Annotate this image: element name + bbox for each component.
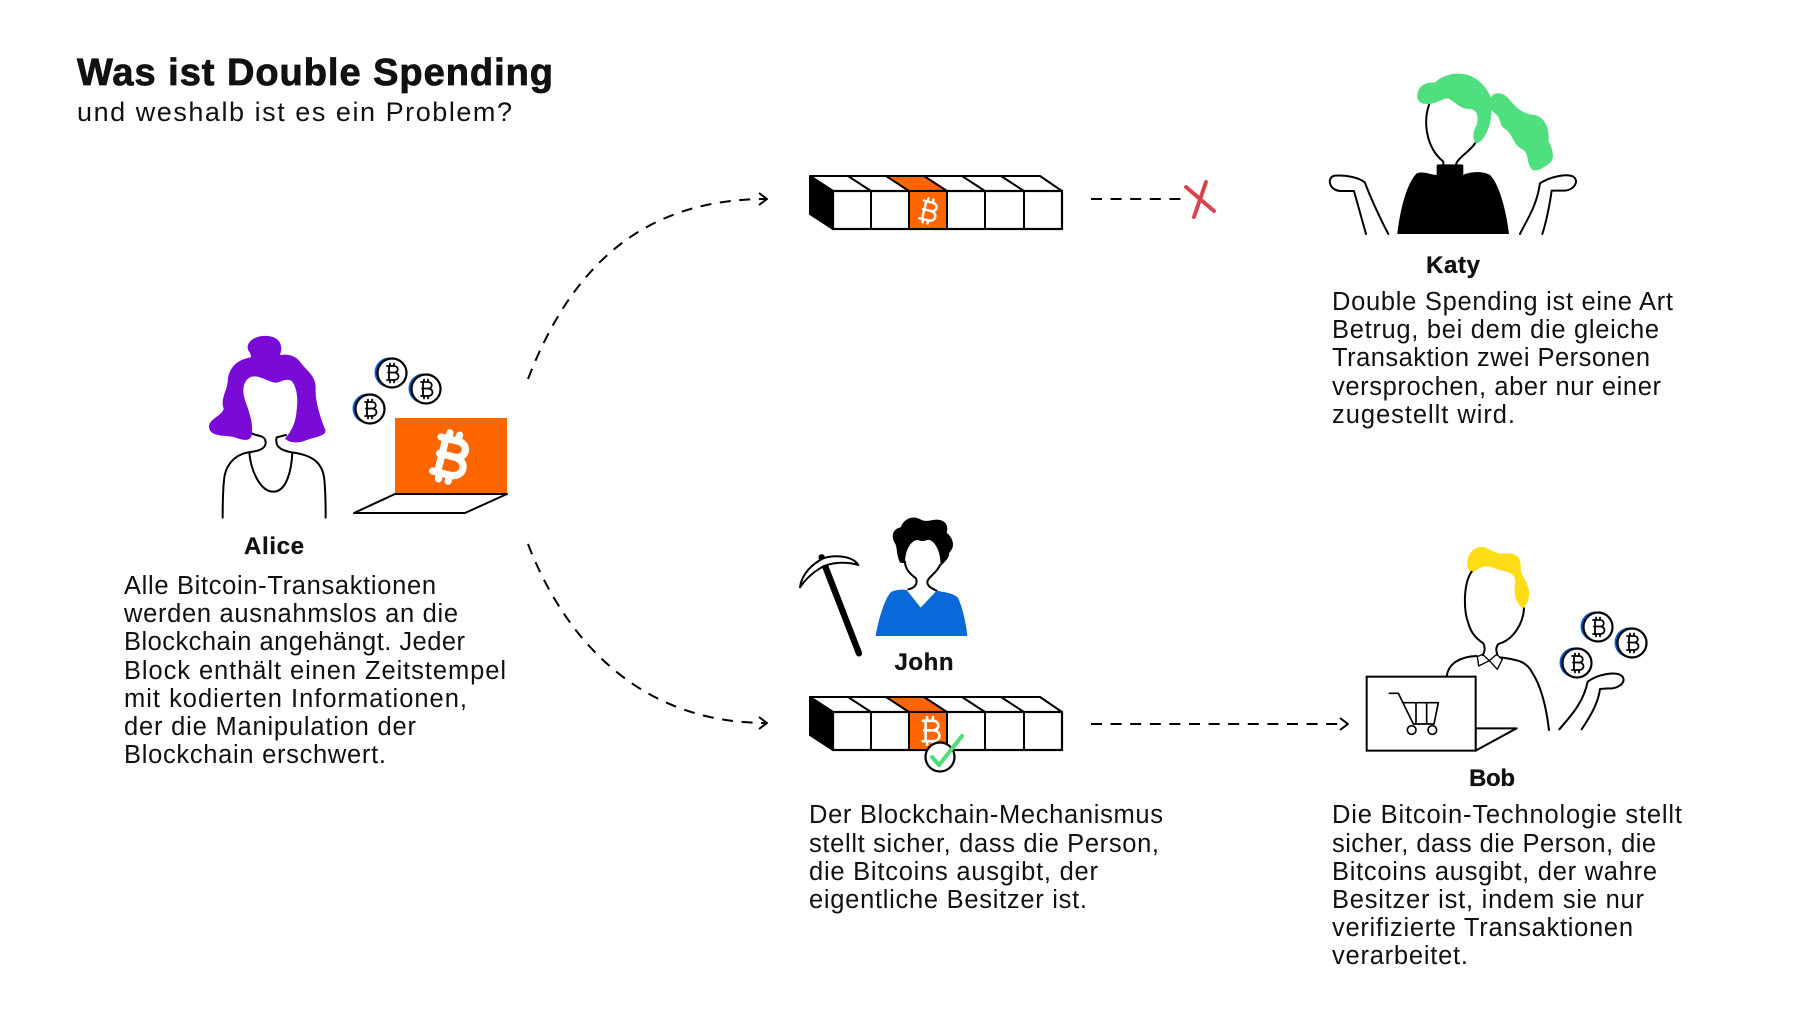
text: John description: Der Blockchain-Mechanismus — [809, 801, 1163, 829]
text: Alice description: der die Manipulation der — [124, 713, 416, 741]
figure: Katy — [1330, 74, 1576, 234]
text: Alice description: Block enthält einen Zeitstempel — [124, 657, 506, 685]
icon: Bob coins — [1560, 612, 1646, 678]
text: John description: die Bitcoins ausgibt, der — [809, 858, 1098, 886]
text: Alice description: Alle Bitcoin-Transaktionen — [124, 572, 436, 600]
text: Katy description: zugestellt wird. — [1332, 401, 1515, 429]
icon: red cross — [1186, 182, 1214, 217]
text: Alice description: Blockchain angehängt. Jeder — [124, 628, 466, 656]
text: Alice description: mit kodierten Informationen, — [124, 685, 467, 713]
chart: upper blockchain — [810, 176, 1062, 229]
text: Katy description: Betrug, bei dem die gleiche — [1332, 316, 1659, 344]
title — [77, 52, 553, 127]
text: Alice description: werden ausnahmslos an die — [123, 600, 458, 628]
title: und weshalb ist es ein Problem? — [77, 97, 512, 127]
arrow: Alice to lower block — [528, 544, 767, 729]
icon: Alice laptop — [354, 418, 507, 513]
icon: pickaxe — [800, 556, 859, 653]
text: John description — [809, 801, 1163, 914]
text: Alice description — [123, 572, 506, 769]
label: John: John — [894, 649, 954, 676]
text: Katy description: Double Spending ist eine Art — [1332, 288, 1673, 316]
text: John description: stellt sicher, dass die Person, — [809, 830, 1159, 858]
text: Bob description: verifizierte Transaktionen — [1332, 914, 1633, 942]
label: Katy: Katy — [1426, 252, 1481, 279]
text: Bob description: Die Bitcoin-Technologie stellt — [1332, 801, 1682, 829]
text: John description: eigentliche Besitzer ist. — [809, 886, 1087, 914]
text: Bob description: verarbeitet. — [1332, 942, 1468, 970]
label: Bob: Bob — [1469, 765, 1515, 792]
arrow: Alice to upper block — [528, 193, 767, 379]
arrow: lower block to Bob — [1091, 718, 1348, 730]
text: Bob description: sicher, dass die Person, die — [1332, 830, 1656, 858]
text: Bob description: Bitcoins ausgibt, der wahre — [1332, 858, 1657, 886]
figure: John — [800, 518, 967, 653]
icon: Alice coins — [352, 358, 440, 424]
chart: lower blockchain — [810, 697, 1062, 750]
figure: Alice — [209, 336, 326, 518]
text: Alice description: Blockchain erschwert. — [124, 741, 386, 769]
text: Katy description: versprochen, aber nur einer — [1332, 373, 1662, 401]
figure: Bob — [1367, 547, 1624, 751]
title: Was ist Double Spending — [77, 52, 553, 94]
icon: green check — [926, 736, 962, 772]
text: Bob description — [1332, 801, 1682, 970]
text: Katy description: Transaktion zwei Personen — [1332, 344, 1650, 372]
arrow: upper block to rejected mark — [1091, 198, 1181, 200]
text: Bob description: Besitzer ist, indem sie nur — [1332, 886, 1644, 914]
text: Katy description — [1332, 288, 1673, 429]
label: Alice: Alice — [244, 533, 304, 560]
icon: Bob laptop — [1367, 677, 1517, 751]
